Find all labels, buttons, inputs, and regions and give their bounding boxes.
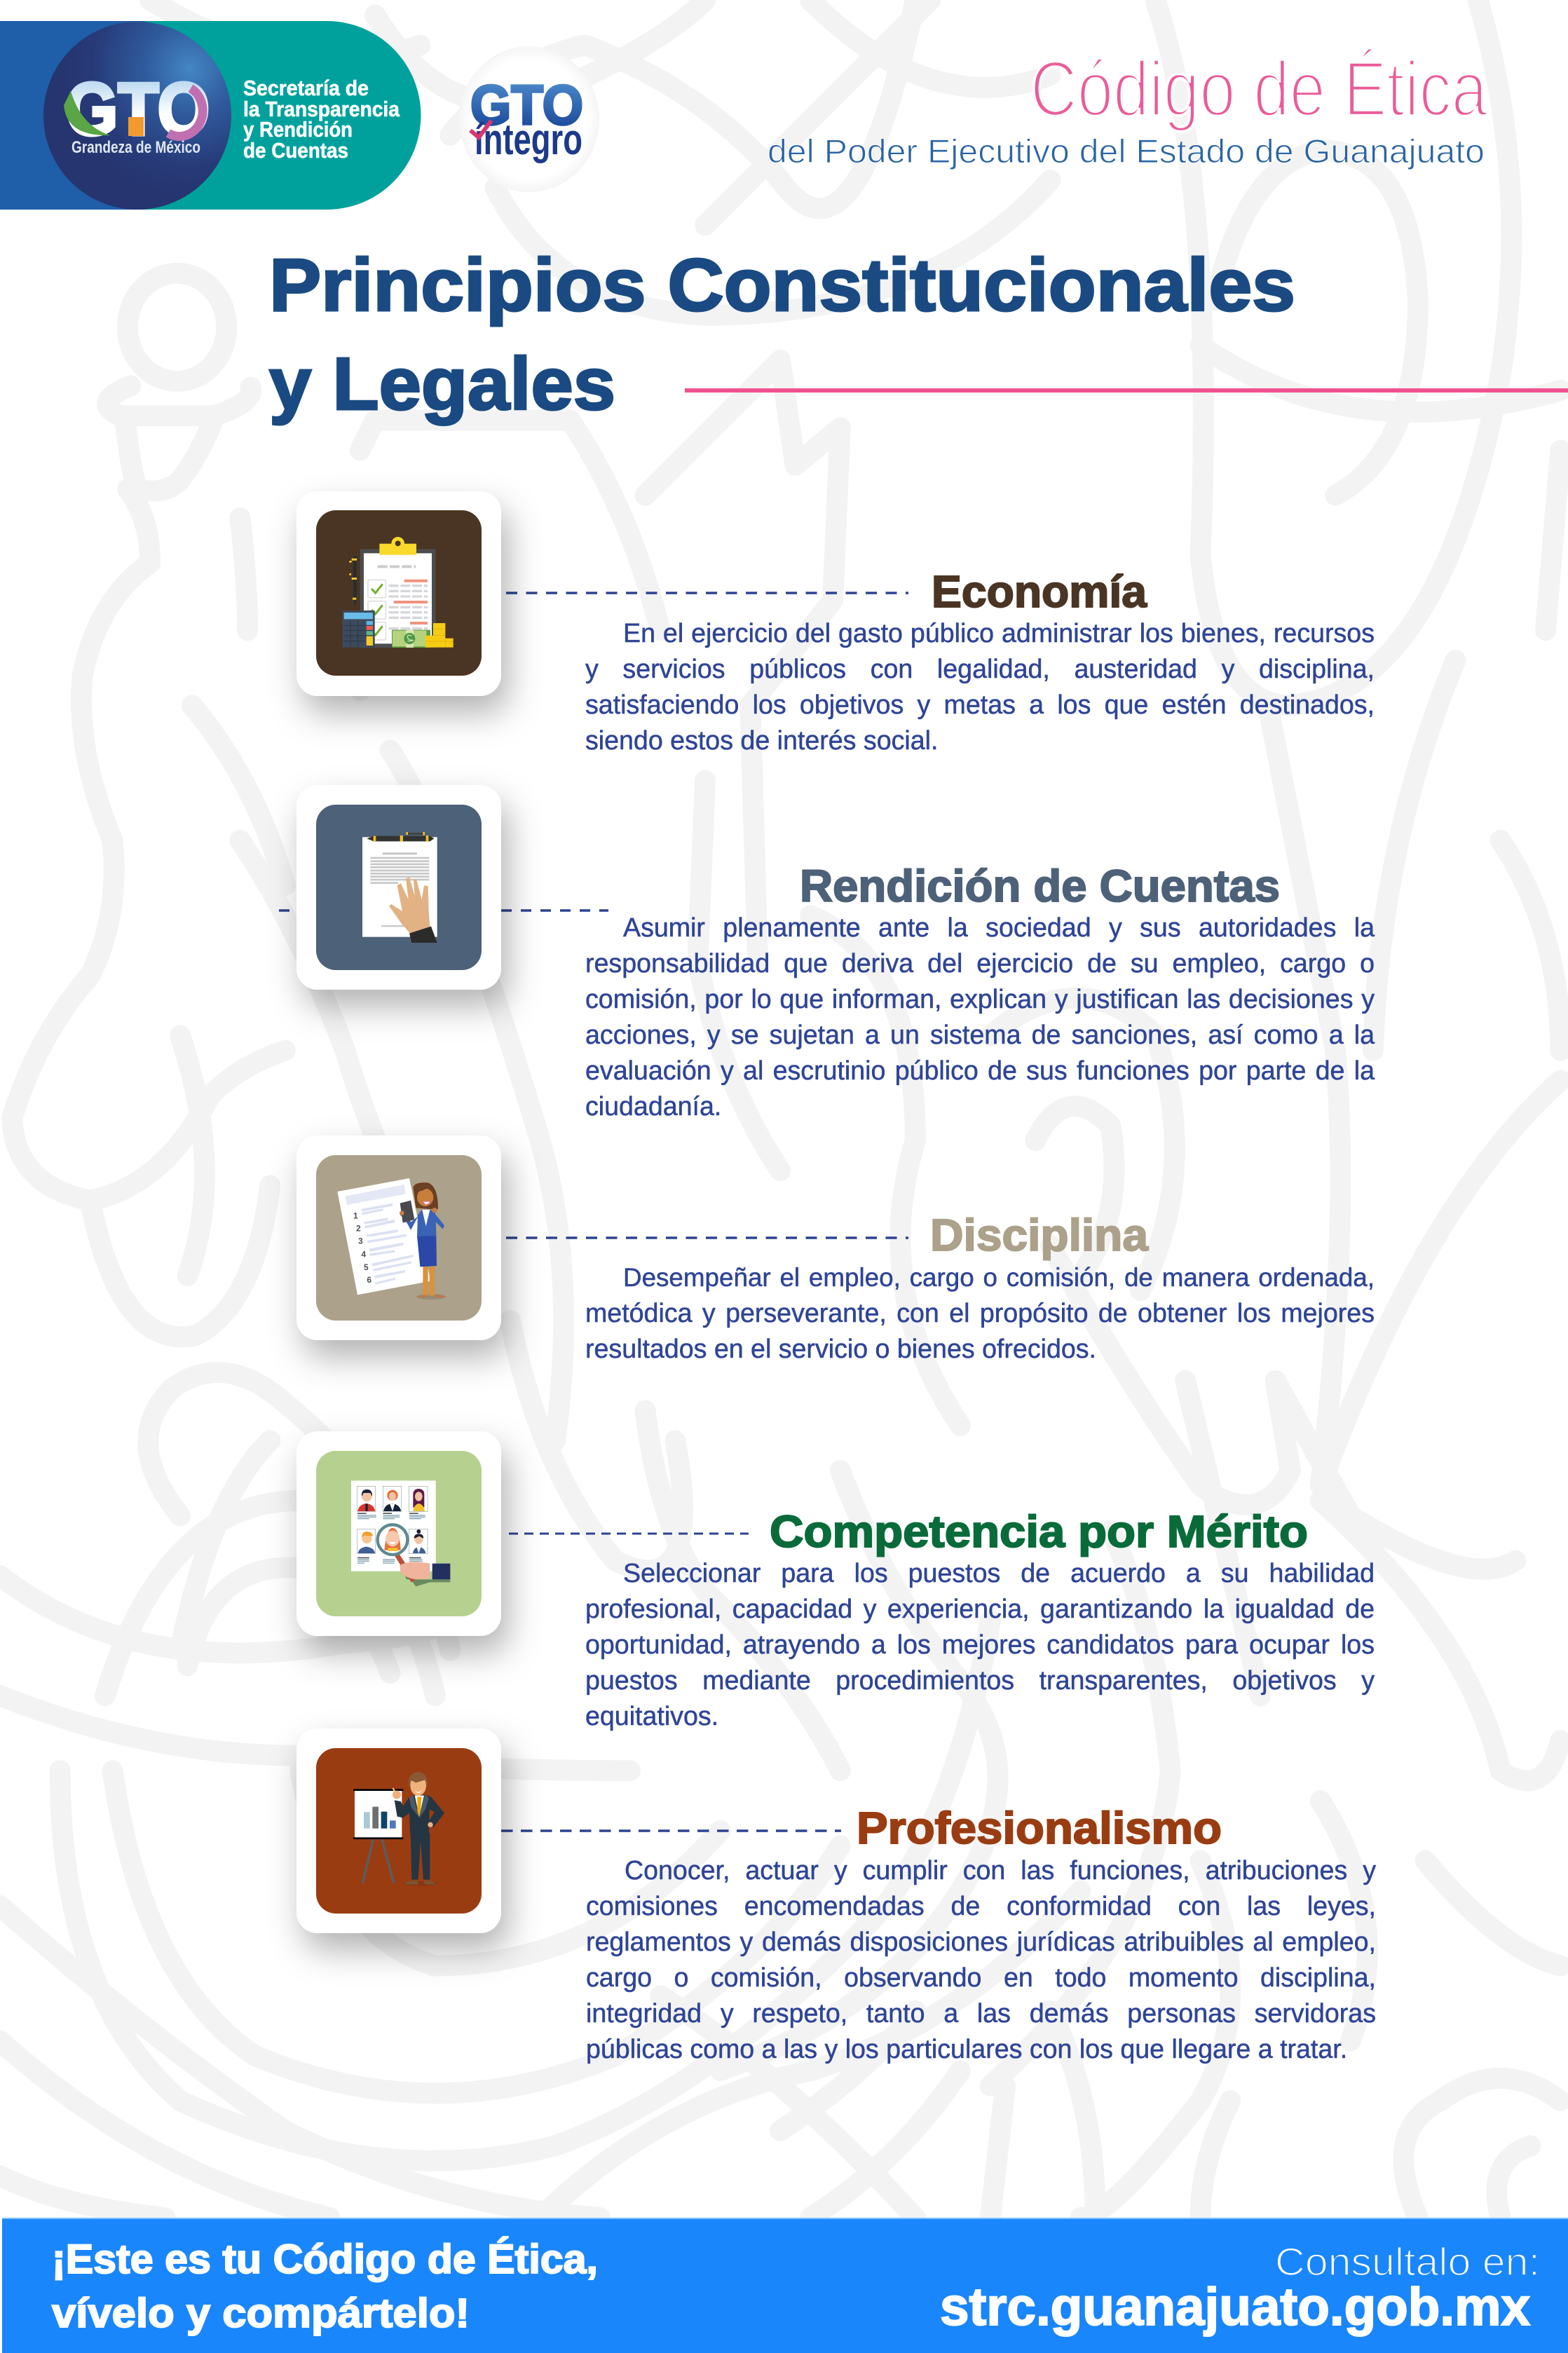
heading: Rendición de Cuentas: Rendición de Cuentas — [800, 861, 1280, 911]
text block: Economía — [585, 618, 1375, 755]
icon: candidate profiles and magnifier — [351, 1480, 450, 1586]
text block: Rendición de Cuentas: acciones, y se sujetan a un sistema de sanciones, así como a la — [585, 1020, 1375, 1049]
text block: Disciplina — [585, 1263, 1375, 1363]
main title — [269, 244, 1295, 425]
text block: Economía: siendo estos de interés social. — [585, 725, 938, 755]
text block: Rendición de Cuentas: ciudadanía. — [585, 1091, 721, 1121]
connector: Rendición de Cuentas — [279, 909, 608, 912]
header logo: Secretaría banner — [0, 21, 421, 210]
connector: Economía — [506, 592, 908, 594]
text block: Competencia por Mérito: puestos mediante procedimientos transparentes, objetivos y — [585, 1665, 1375, 1695]
icon: presenter with chart — [353, 1772, 444, 1886]
logo: GTO íntegro: íntegro — [475, 116, 582, 164]
footer slogan: ¡Este es tu Código de Ética, — [52, 2237, 598, 2282]
text block: Profesionalismo: comisiones encomendadas de conformidad con las leyes, — [586, 1891, 1376, 1921]
text block: Disciplina: resultados en el servicio o bienes ofrecidos. — [585, 1334, 1096, 1363]
heading: Disciplina: Disciplina — [930, 1210, 1148, 1260]
heading: Competencia por Mérito: Competencia por Mérito — [770, 1506, 1308, 1557]
text block: Profesionalismo: cargo o comisión, observando en todo momento disciplina, — [586, 1963, 1376, 1992]
logo ball: GTO Grandeza de México — [43, 22, 231, 210]
text block: Rendición de Cuentas: responsabilidad que deriva del ejercicio de su empleo, cargo o — [585, 948, 1375, 978]
text block: Disciplina: Desempeñar el empleo, cargo o comisión, de manera ordenada, — [623, 1263, 1375, 1292]
text block: Competencia por Mérito: oportunidad, atrayendo a los mejores candidatos para ocupar los — [585, 1630, 1375, 1659]
Secretaría name: de Cuentas — [243, 138, 348, 163]
text block: Competencia por Mérito — [585, 1558, 1375, 1731]
text block: Competencia por Mérito: Seleccionar para los puestos de acuerdo a su habilidad — [623, 1558, 1375, 1588]
header subtitle: del Poder Ejecutivo del Estado de Guanajuato — [768, 132, 1485, 170]
connector: Competencia por Mérito — [509, 1532, 749, 1535]
card: Competencia por Mérito icon — [296, 1431, 501, 1636]
text block: Competencia por Mérito: profesional, capacidad y experiencia, garantizando la igualdad de — [585, 1594, 1375, 1623]
text block: Economía: En el ejercicio del gasto público administrar los bienes, recursos — [623, 618, 1375, 648]
card: Rendición de Cuentas icon — [296, 785, 501, 990]
icon: woman with numbered list: 4 — [361, 1249, 366, 1259]
icon: woman with numbered list: 3 — [358, 1236, 363, 1246]
icon: woman with numbered list: 6 — [367, 1275, 371, 1285]
footer slogan: vívelo y compártelo! — [52, 2291, 470, 2336]
footer URL: strc.guanajuato.gob.mx — [940, 2277, 1530, 2337]
Secretaría name — [243, 76, 400, 163]
card: Disciplina icon — [296, 1135, 501, 1340]
logo ball: GTO Grandeza de México: GTO — [66, 68, 210, 151]
connector: Disciplina — [506, 1236, 908, 1239]
card: Profesionalismo icon — [296, 1728, 501, 1933]
text block: Disciplina: metódica y perseverante, con el propósito de obtener los mejores — [585, 1298, 1375, 1328]
main title: y Legales — [269, 343, 615, 425]
icon: clipboard, calculator, money, coins — [343, 537, 454, 648]
text block: Profesionalismo: públicas como a las y los particulares con los que llegare a tratar. — [586, 2034, 1347, 2064]
logo ball: GTO Grandeza de México: Grandeza de México — [71, 138, 200, 157]
text block: Economía: y servicios públicos con legalidad, austeridad y disciplina, — [585, 654, 1375, 683]
heading: Economía: Economía — [932, 566, 1147, 617]
text block: Profesionalismo: Conocer, actuar y cumplir con las funciones, atribuciones y — [625, 1855, 1376, 1885]
heading: Profesionalismo: Profesionalismo — [857, 1803, 1222, 1853]
icon: woman with numbered list: 2 — [356, 1224, 361, 1234]
footer slogan — [52, 2237, 598, 2336]
text block: Rendición de Cuentas: comisión, por lo que informan, explican y justifican las decisiones y — [585, 984, 1375, 1014]
icon: hand on document — [362, 832, 437, 943]
icon: woman with numbered list — [337, 1178, 446, 1300]
footer banner — [2, 2218, 1568, 2353]
logo: GTO íntegro: GTO — [470, 74, 583, 136]
logo: GTO íntegro — [459, 46, 599, 192]
Secretaría name: la Transparencia — [243, 97, 400, 121]
pink rule — [685, 388, 1568, 393]
text block: Rendición de Cuentas — [585, 913, 1375, 1121]
text block: Economía: satisfaciendo los objetivos y metas a los que estén destinados, — [585, 690, 1375, 719]
text block: Profesionalismo: reglamentos y demás disposiciones jurídicas atribuibles al empleo, — [586, 1927, 1376, 1956]
text block: Competencia por Mérito: equitativos. — [585, 1701, 718, 1731]
card: Economía icon — [296, 491, 501, 696]
Secretaría name: y Rendición — [243, 117, 353, 142]
connector: Profesionalismo — [501, 1829, 841, 1832]
main title: Principios Constitucionales — [269, 244, 1295, 327]
text block: Profesionalismo: integridad y respeto, tanto a las demás personas servidoras — [586, 1998, 1376, 2028]
footer consult label: Consultalo en: — [1275, 2239, 1540, 2284]
Secretaría name: Secretaría de — [243, 76, 369, 100]
text block: Rendición de Cuentas: evaluación y al escrutinio público de sus funciones por parte de la — [585, 1056, 1375, 1085]
header title: Código de Ética: Código de Ética — [1030, 46, 1487, 132]
text block: Rendición de Cuentas: Asumir plenamente ante la sociedad y sus autoridades la — [623, 913, 1375, 942]
icon: woman with numbered list: 1 — [353, 1211, 358, 1221]
icon: woman with numbered list: 5 — [364, 1262, 369, 1272]
